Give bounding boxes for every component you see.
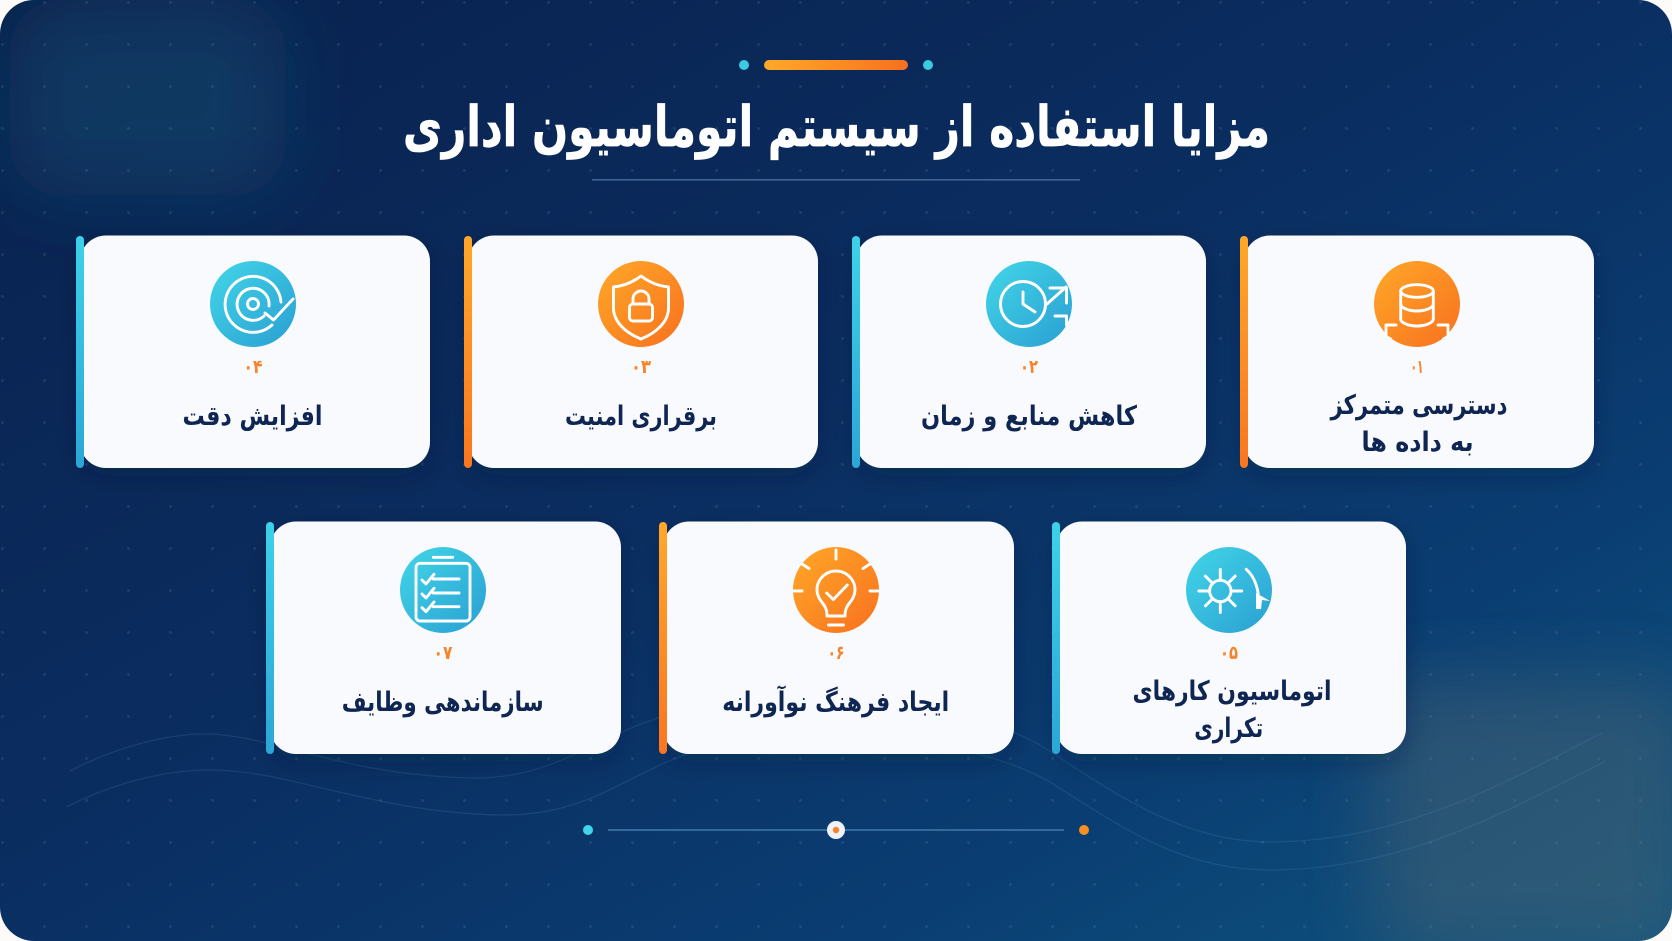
icon: database <box>1374 261 1460 348</box>
number: ۰۱ <box>1410 356 1424 378</box>
top accent: dots and bar <box>739 60 933 70</box>
icon: shield with lock <box>598 261 684 347</box>
card 05 <box>1052 522 1406 754</box>
number: ۰۵ <box>1220 642 1238 664</box>
number: ۰۴ <box>244 356 262 378</box>
icon: checklist clipboard <box>400 547 486 633</box>
number: ۰۷ <box>434 642 453 664</box>
icon: clock and arrow <box>986 261 1072 347</box>
card 03 <box>464 236 818 468</box>
label <box>1132 676 1332 744</box>
title: مزایا استفاده از سیستم اتوماسیون اداری <box>403 95 1270 160</box>
icon: light bulb with check <box>793 547 879 633</box>
label: کاهش منابع و زمان <box>921 401 1137 432</box>
bottom progress decoration <box>583 821 1089 839</box>
icon: target <box>210 261 296 347</box>
title underline <box>592 179 1080 181</box>
number: ۰۶ <box>828 642 844 664</box>
card 02 <box>852 236 1206 468</box>
card 06 <box>659 522 1014 754</box>
card 04 <box>76 236 430 468</box>
label: به داده ها <box>1362 427 1474 458</box>
card 01 <box>1240 236 1594 468</box>
label: دسترسی متمرکز <box>1329 390 1508 421</box>
label: برقراری امنیت <box>565 401 717 432</box>
number: ۰۲ <box>1020 356 1038 378</box>
number: ۰۳ <box>631 356 651 378</box>
label: تکراری <box>1194 713 1263 744</box>
label: سازماندهی وظایف <box>342 687 544 718</box>
label: اتوماسیون کارهای <box>1132 676 1332 707</box>
icon: gear and arrow <box>1186 547 1272 633</box>
label: ایجاد فرهنگ نوآورانه <box>722 685 949 718</box>
card 07 <box>266 522 621 754</box>
label <box>1329 390 1508 458</box>
label: افزایش دقت <box>182 401 322 432</box>
